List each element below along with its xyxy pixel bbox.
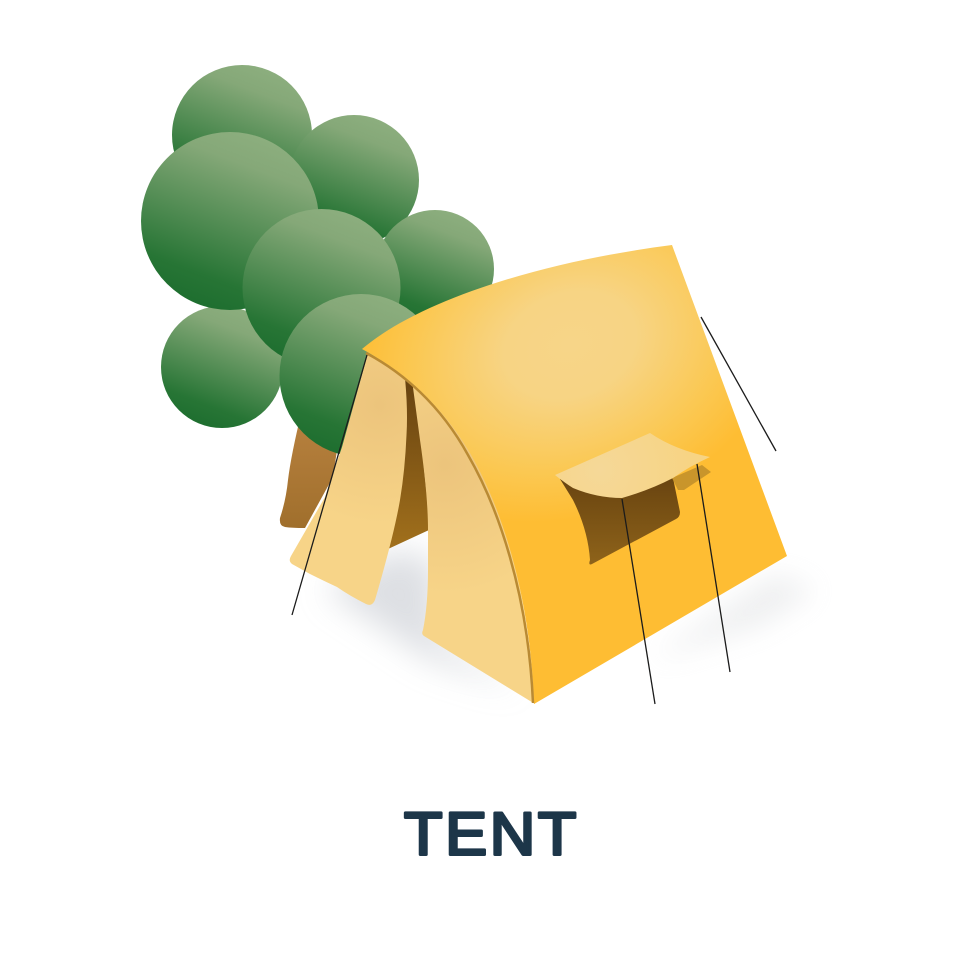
right door flap [412, 380, 535, 704]
awning shadow [672, 465, 711, 490]
tent roof and side [362, 245, 787, 704]
tent [290, 245, 787, 704]
tree foliage [141, 65, 494, 457]
ground shadow [325, 550, 815, 690]
seam [366, 353, 533, 703]
tent interior [388, 378, 429, 549]
tree trunk [280, 410, 340, 528]
window awning [555, 433, 710, 498]
tree [141, 65, 494, 528]
title: TENT [404, 801, 579, 868]
window opening [560, 478, 680, 564]
guy ropes [292, 317, 776, 704]
left door flap [290, 353, 407, 605]
